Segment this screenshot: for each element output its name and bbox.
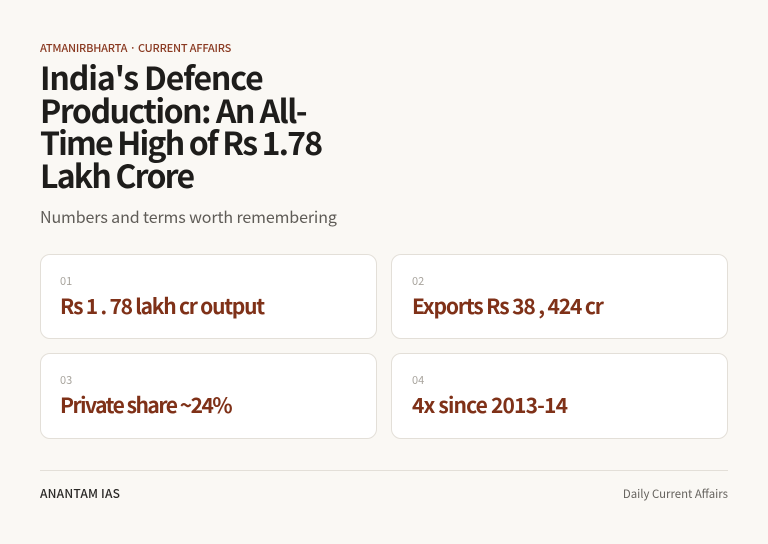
card 01 value: Rs 1 . 78 lakh cr output: [60, 291, 264, 321]
title: Time High of Rs 1.78: [40, 119, 321, 165]
card 02: exports: [391, 254, 728, 339]
card 03 value: Private share ~24%: [60, 390, 231, 420]
eyebrow label: ATMANIRBHARTA · CURRENT AFFAIRS: [40, 40, 231, 56]
card 04: growth: [391, 353, 728, 439]
title: Lakh Crore: [40, 152, 193, 198]
card 01: output: [40, 254, 377, 339]
card 01 number: 01: [60, 273, 72, 289]
card 02 number: 02: [412, 273, 424, 289]
subtitle: Numbers and terms worth remembering: [40, 204, 337, 228]
title: [40, 54, 322, 198]
footer tagline: Daily Current Affairs: [623, 486, 728, 502]
title: Production: An All-: [40, 87, 306, 133]
card 03 number: 03: [60, 372, 72, 388]
card 04 number: 04: [412, 372, 424, 388]
footer brand: ANANTAM IAS: [40, 485, 120, 502]
card 03: private share: [40, 353, 377, 439]
title: India's Defence: [40, 54, 263, 100]
card 02 value: Exports Rs 38 , 424 cr: [412, 291, 603, 321]
card 04 value: 4x since 2013-14: [412, 390, 567, 420]
